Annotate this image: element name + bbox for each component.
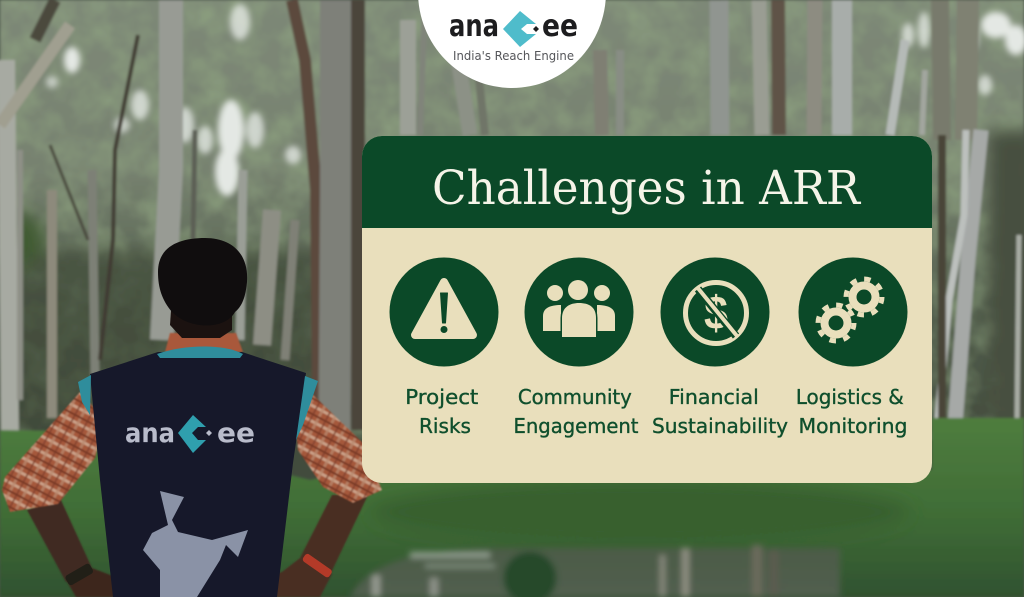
central large trunks xyxy=(292,0,318,400)
icon: no money xyxy=(660,258,770,366)
logo wordmark xyxy=(449,9,578,47)
icon: no money: $ xyxy=(704,286,728,339)
darker forest depth, lower band xyxy=(0,130,1024,430)
icon: warning triangle xyxy=(390,258,498,366)
label: project risks: Risks xyxy=(419,414,471,438)
logo wordmark: ee xyxy=(542,9,578,44)
vest logo: ee xyxy=(217,418,255,449)
logo badge xyxy=(418,0,606,88)
shirt sleeves xyxy=(2,333,382,512)
ground: grass xyxy=(0,418,1024,597)
vest map of India xyxy=(143,491,248,597)
logo wordmark: ana xyxy=(449,9,499,44)
neck and head xyxy=(158,238,247,338)
vest xyxy=(78,346,318,597)
label: logistics and monitoring: Logistics & xyxy=(796,385,904,409)
right group xyxy=(719,0,720,135)
label: community engagement: Engagement xyxy=(514,414,639,438)
panel body xyxy=(362,136,932,483)
panel: challenges xyxy=(362,136,932,483)
label: project risks: Project xyxy=(405,385,478,409)
label: community engagement: Community xyxy=(518,385,632,409)
vest logo xyxy=(125,415,255,453)
shirt collar xyxy=(165,333,243,352)
title: Challenges in ARR xyxy=(432,161,862,216)
left group xyxy=(6,60,10,440)
icon: community group xyxy=(524,258,634,366)
water reflection xyxy=(350,545,840,597)
icon: gears xyxy=(798,258,908,366)
vest logo: ana xyxy=(125,418,175,449)
wristbands xyxy=(64,553,333,586)
person seen from behind xyxy=(2,238,382,597)
label: financial sustainability: Sustainability xyxy=(652,414,788,438)
label: logistics and monitoring: Monitoring xyxy=(798,414,908,438)
ground: reeds xyxy=(370,480,910,544)
label: financial sustainability: Financial xyxy=(669,385,759,409)
logo tagline: India's Reach Engine xyxy=(453,49,574,63)
arms and hands xyxy=(27,495,368,597)
panel header xyxy=(362,136,932,228)
sky gaps through canopy xyxy=(46,4,1024,196)
water plant xyxy=(504,552,556,597)
